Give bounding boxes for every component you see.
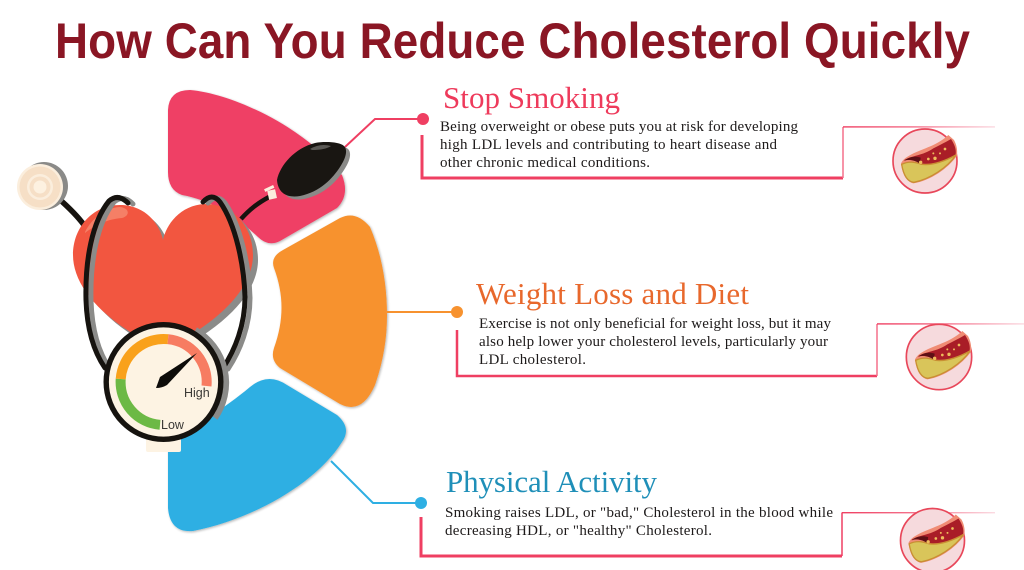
panel: physical activity petal: [168, 379, 346, 531]
heading: stop smoking: Stop Smoking: [443, 80, 620, 115]
text: stop smoking: other chronic medical conditions.: [440, 155, 650, 171]
gauge label: high: High: [184, 386, 210, 400]
text: stop smoking: Being overweight or obese puts you at risk for developing: [440, 119, 798, 135]
icon: stethoscope chestpiece: [17, 162, 84, 225]
gauge needle: [156, 353, 197, 388]
icon: gauge: [106, 325, 226, 452]
frame line: weight loss: [457, 323, 1024, 376]
frame line: physical activity: [421, 512, 995, 556]
icon: pressure bulb: [241, 142, 350, 219]
icon: stethoscope tubing: [86, 197, 250, 369]
text: physical activity: [445, 505, 833, 539]
text: weight loss and diet: also help lower your cholesterol levels, particularly your: [479, 334, 828, 350]
text: stop smoking: high LDL levels and contributing to heart disease and: [440, 137, 778, 153]
heading: weight loss and diet: Weight Loss and Diet: [476, 276, 749, 311]
gauge arc: green: [121, 379, 160, 425]
text: weight loss and diet: LDL cholesterol.: [479, 352, 586, 368]
gauge label: low: Low: [161, 418, 185, 432]
gauge arc: red: [168, 339, 207, 386]
icon: heart: [73, 204, 258, 355]
connector: stop smoking: [345, 113, 429, 147]
connector: weight loss: [387, 306, 463, 318]
panel: stop smoking petal: [168, 90, 345, 243]
text: physical activity: decreasing HDL, or "healthy" Cholesterol.: [445, 523, 712, 539]
icon: artery 2: [906, 324, 972, 390]
frame line: stop smoking: [422, 126, 995, 178]
text: stop smoking: [440, 119, 798, 171]
text: weight loss and diet: [479, 316, 832, 368]
title: How Can You Reduce Cholesterol Quickly: [55, 14, 970, 69]
connector: physical activity: [331, 461, 427, 509]
text: physical activity: Smoking raises LDL, or "bad," Cholesterol in the blood while: [445, 505, 833, 521]
panel: weight loss petal: [273, 215, 387, 407]
heading: physical activity: Physical Activity: [446, 464, 658, 499]
gauge arc: orange: [121, 339, 168, 379]
icon: artery 1: [893, 129, 957, 193]
text: weight loss and diet: Exercise is not only beneficial for weight loss, but it may: [479, 316, 832, 332]
icon: artery 3: [900, 508, 965, 570]
